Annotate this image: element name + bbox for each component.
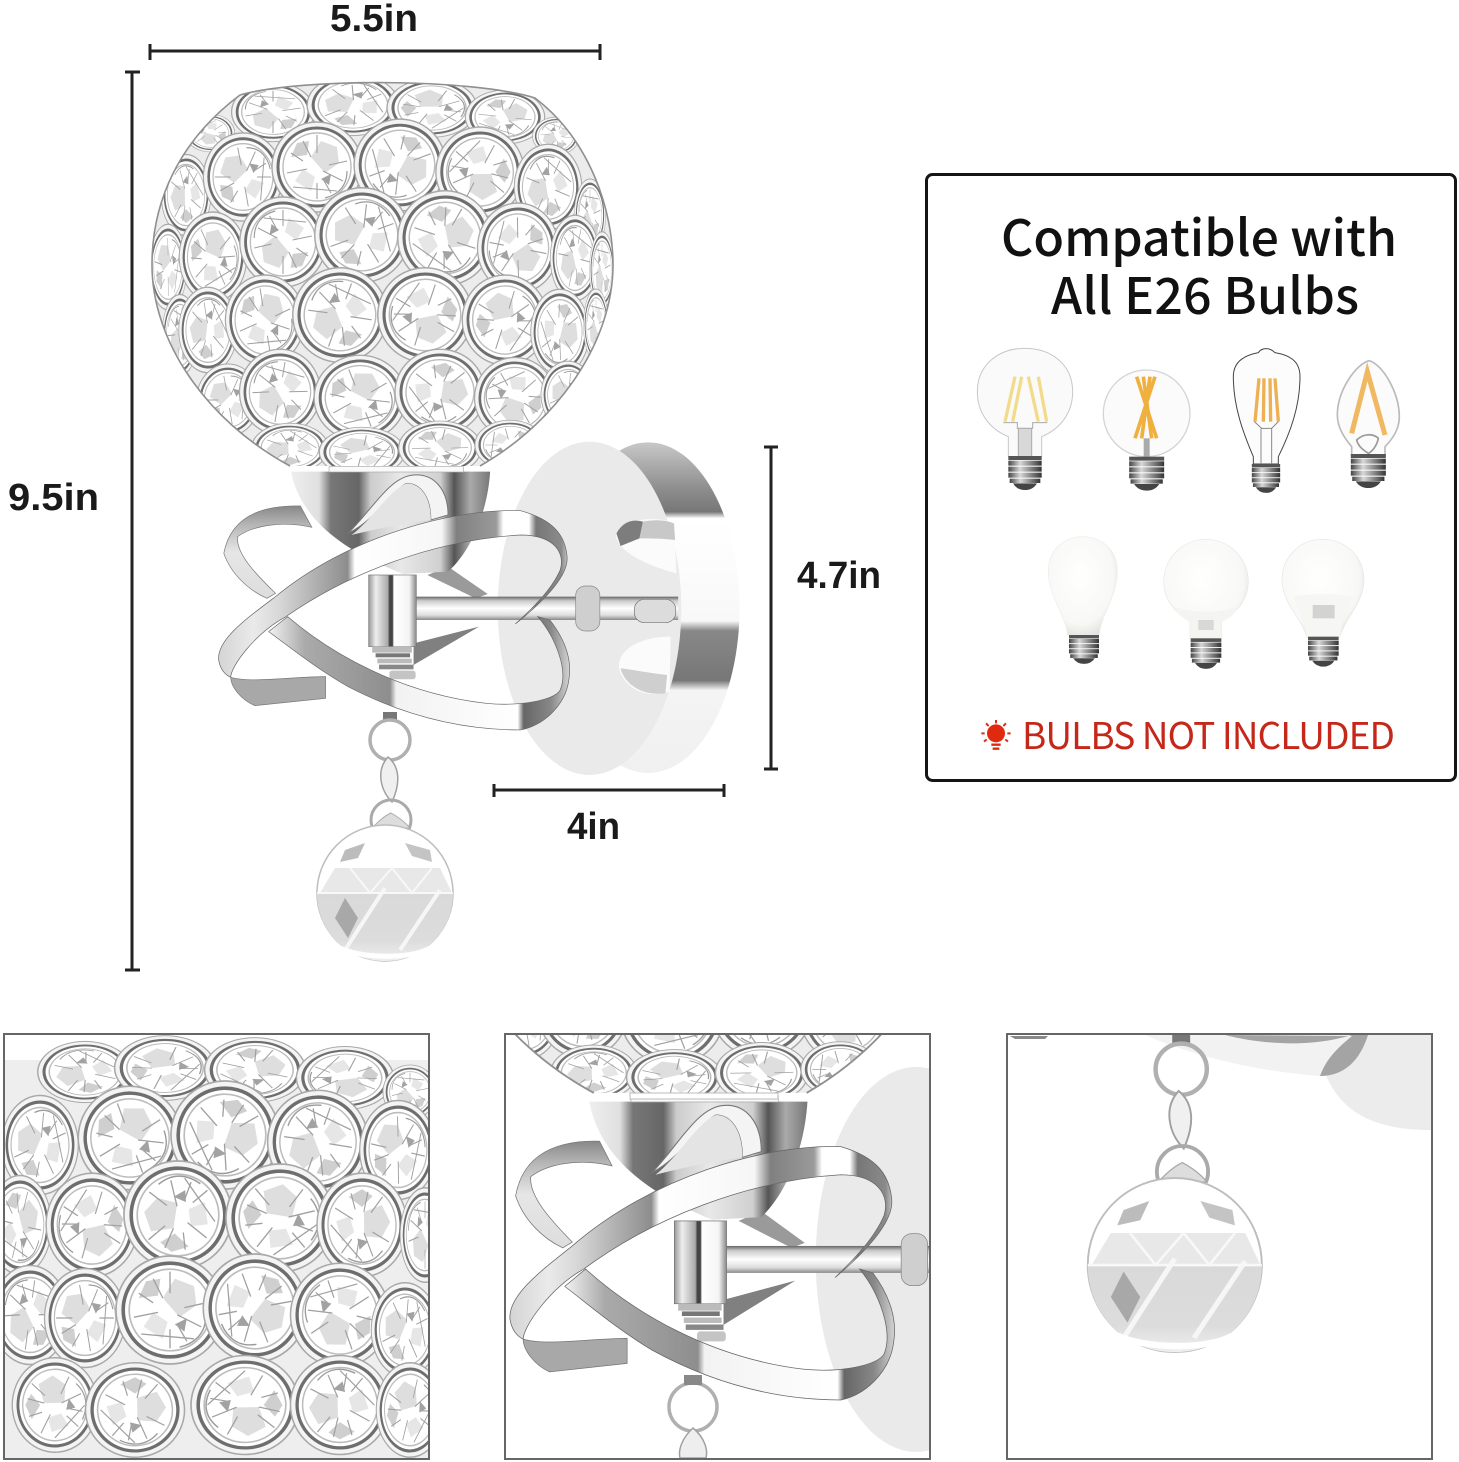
dimension: depth 4in bbox=[494, 784, 724, 848]
icon: edison filament bulb bbox=[1233, 349, 1300, 493]
wall plate edge bbox=[1325, 1035, 1431, 1130]
icon: candle filament bulb bbox=[1337, 361, 1399, 488]
heading: All E26 Bulbs bbox=[1051, 257, 1359, 329]
icon: frosted A19 bulb bbox=[1282, 539, 1364, 667]
crystal pendant bbox=[317, 712, 453, 961]
panel: compatible bulbs bbox=[926, 174, 1456, 780]
sconce lamp product bbox=[146, 63, 740, 961]
icon: round filament bulb bbox=[1103, 370, 1190, 491]
dimension: plate height 4.7in bbox=[764, 447, 881, 769]
ribbon edge bbox=[1145, 1035, 1368, 1076]
crystal globe shade bbox=[146, 63, 615, 484]
bulb icons bbox=[977, 348, 1399, 669]
heading bbox=[1001, 199, 1397, 329]
dimension: height 9.5in: 9.5in bbox=[8, 477, 99, 519]
bulbs not included note: BULBS NOT INCLUDED bbox=[1022, 706, 1395, 760]
heading: Compatible with bbox=[1001, 199, 1397, 271]
icon: frosted globe bulb bbox=[1164, 539, 1248, 669]
icon: red lightbulb warning bbox=[981, 720, 1011, 749]
icon: globe filament bulb bbox=[977, 348, 1073, 490]
panel: crystal shade close-up bbox=[0, 1024, 456, 1462]
dimension: depth 4in: 4in bbox=[567, 806, 620, 848]
icon: frosted A bulb bbox=[1048, 537, 1117, 664]
sconce mount and ribbons bbox=[219, 442, 740, 775]
dimension: height 9.5in bbox=[8, 72, 140, 970]
panel: mount close-up bbox=[504, 1033, 931, 1460]
dimension: plate height 4.7in: 4.7in bbox=[797, 555, 881, 597]
panel: pendant close-up bbox=[1007, 1033, 1432, 1459]
dimension: width 5.5in bbox=[150, 0, 600, 60]
